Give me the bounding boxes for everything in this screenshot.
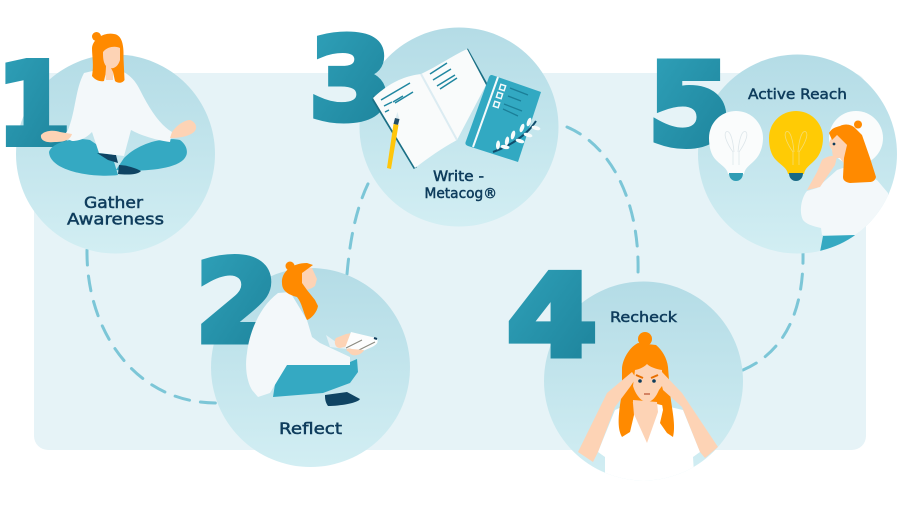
figure: seated woman with notebook: [246, 262, 378, 406]
circle 3: [360, 28, 558, 226]
figure: meditating woman: [41, 32, 196, 176]
icon: pencil: [387, 112, 400, 169]
dashed connector: step 2 to 3: [347, 176, 372, 274]
icon: white bulb behind woman: [829, 111, 883, 165]
number 4: 4: [507, 252, 597, 382]
circle 5: [698, 54, 897, 254]
dashed connector: step 4 to 5: [743, 253, 803, 370]
icon: closed checklist notebook: [465, 75, 541, 162]
circle 2: [211, 268, 410, 467]
label: Write - Metacog: Metacog®: [424, 186, 497, 202]
step 3: write: [309, 16, 558, 226]
label: Reflect: Reflect: [279, 419, 342, 438]
label: Active Reach: Active Reach: [748, 87, 847, 103]
background panel: [34, 73, 866, 450]
number 5: 5: [648, 41, 731, 171]
label: Write - Metacog: Write -: [433, 169, 484, 185]
circle 4: [544, 282, 743, 480]
step 1: gather awareness: [0, 32, 215, 254]
step 2: reflect: [196, 238, 410, 467]
figure: woman holding her temples: [578, 332, 718, 490]
icon: open notebook: [373, 49, 487, 168]
icon: yellow bulb: [769, 111, 823, 181]
step 4: recheck: [508, 270, 743, 480]
step 5: active reach: [648, 41, 897, 254]
icon: white bulb: [709, 111, 763, 181]
circle 1: [16, 54, 215, 254]
label: Recheck: Recheck: [610, 310, 678, 326]
label: Gather Awareness: [67, 193, 164, 228]
number 2: 2: [196, 238, 278, 368]
label: Gather Awareness: Gather: [84, 193, 143, 212]
number 3: 3: [309, 16, 392, 146]
dashed connector: step 3 to 4: [567, 127, 638, 274]
figure: thinking woman: [801, 120, 890, 252]
dashed connector: step 1 to 2: [87, 250, 218, 403]
label: Write - Metacog: [424, 169, 497, 202]
label: Gather Awareness: Awareness: [67, 210, 164, 228]
